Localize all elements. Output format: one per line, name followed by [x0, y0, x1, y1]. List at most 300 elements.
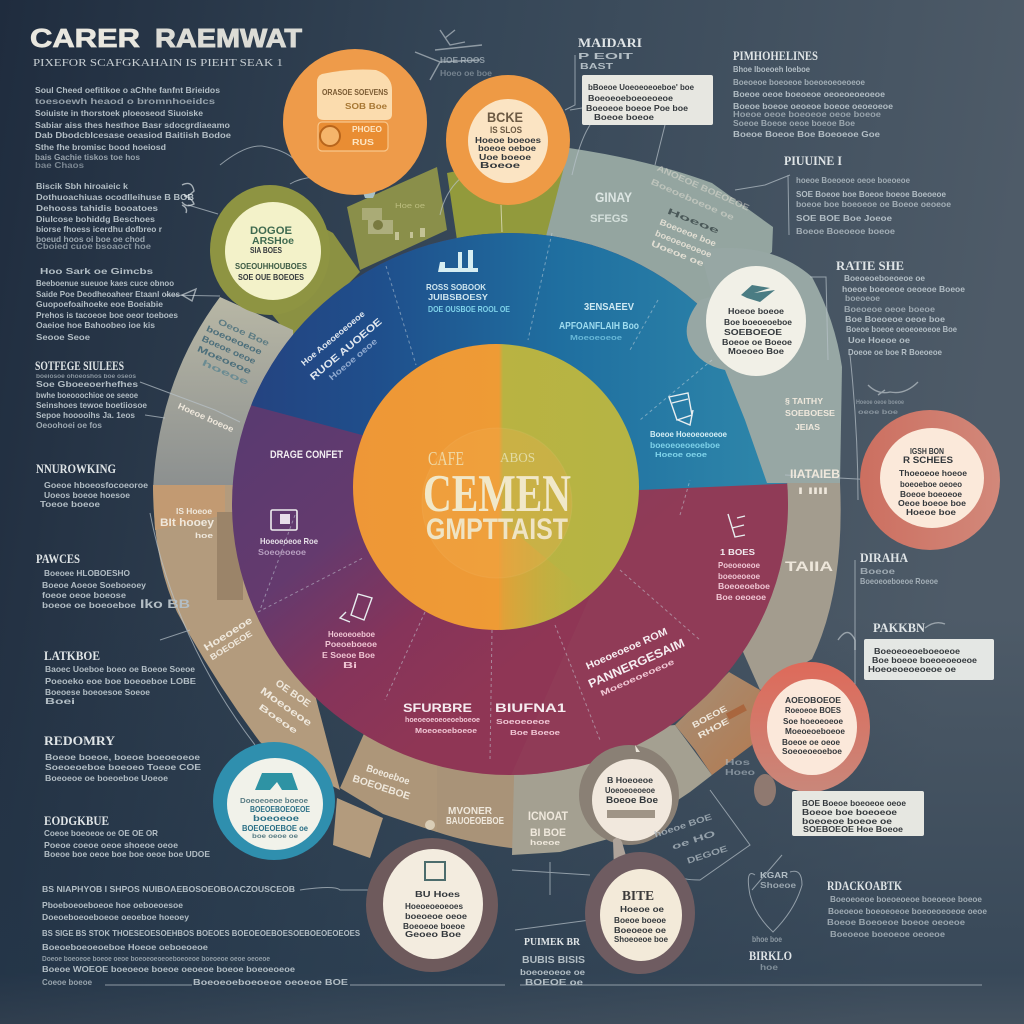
inner ring: blue right label 1: APFOANFLAIH Boo: [559, 321, 639, 332]
inner ring: right maroon label: [716, 514, 770, 602]
inner ring: blue right label 1: [559, 302, 639, 342]
droplet connector: [362, 166, 377, 198]
right heading and note card: Hoeoeoeoeoeoe oe: [868, 665, 957, 674]
ring label: tan bottom rotated: BOEOEBOE: [351, 773, 412, 803]
inner ring: purple icon label: Hoeoeoeoe Roe: [260, 536, 318, 546]
callout: olive circle: [210, 185, 330, 315]
right small sketch and caption: [856, 382, 918, 416]
left text block 1: toesoewh heaod o bromnhoeidcs: [35, 96, 215, 106]
right text block: roadmap: Boeoeoe boeoeoeoe boeoeoeoeoe oeoe: [828, 906, 987, 916]
icon: teal mountain glyph: [255, 773, 298, 790]
ring: [579, 745, 679, 845]
lower note card: SOEBOEOE Hoe Boeoe: [803, 825, 904, 834]
callout: sage circle with white disc: [706, 266, 806, 376]
right small sketch and caption: oeoe boe: [858, 409, 899, 416]
right text block: roadmap: Boeoe Boeoeoe boeoe oeoeoe: [827, 917, 965, 927]
callout: red circle right: [860, 410, 1000, 550]
ring label: tan rotated 1: [202, 615, 260, 662]
small top text: CAFE: [428, 448, 464, 470]
title: CARER: [30, 23, 140, 53]
right text block: rating: Boeoeoe oeoe boeoe: [844, 304, 935, 314]
left text block 1: Soiuiste in thorstoek ploeoseod Siuoiske: [35, 108, 203, 118]
orange-tan label patch: [153, 485, 225, 530]
bottom left text block: Boeoeboeoeoeboe Hoeoe oeboeoeoe: [42, 942, 208, 952]
inner: [468, 99, 548, 183]
inner: [383, 849, 483, 959]
right text block: rating: Doeoe oe boe R Boeoeoe: [848, 347, 942, 357]
sage lobe over ring: [687, 270, 800, 483]
left block 9: Poeoe coeoe oeoe shoeoe oeoe: [44, 840, 178, 850]
icon: document cup: [669, 393, 693, 425]
ring label: sage upper rotated 1: [649, 163, 751, 226]
callout: plum circle bottom right: Boeoeoe oe: [614, 926, 667, 935]
left text block 2: Biscik Sbh hiroaieic k: [36, 181, 128, 191]
inner ring: blue right label 2: [650, 393, 727, 459]
right text block: dialogue: Boeoeoeboeoe Roeoe: [860, 576, 938, 586]
callout: red circle lower: Moeoeoeboeoe: [785, 727, 846, 736]
top centre-right heading: P EOIT: [578, 51, 635, 61]
top centre-right heading: [578, 35, 642, 71]
grey bottom segment: [512, 725, 712, 855]
ring label: sage upper rotated 2: [650, 205, 723, 270]
right text block: planning: PIUUINE I: [784, 153, 842, 168]
icon: heart sketch with label: KGAR: [760, 870, 788, 880]
bottom left text block: [42, 884, 360, 987]
callout: olive circle: SIA BOES: [250, 246, 283, 255]
ring label: tan rotated 1: BOEOEOE: [208, 628, 254, 662]
left block 7: LATKBOE: [44, 648, 100, 663]
inner ring: maroon icon label: Hoeoeoeboe: [328, 629, 375, 639]
ring label: sage upper rotated 2: boeoeoeoeoe: [654, 228, 713, 260]
inner ring: blue right label 2: Boeoe Hoeoeoeoeoe: [650, 429, 727, 439]
centre title line 1: CEMEN: [423, 465, 571, 523]
icon: bars: [438, 250, 478, 272]
title word 2: RAEMWAT: [155, 23, 302, 53]
left block 9: EODGKBUE: [44, 813, 109, 828]
callout: teal circle: [213, 742, 335, 860]
inner ring: blue top label: ROSS SOBOOK: [426, 282, 487, 292]
right text block: roadmap: Boeoeoeoe boeoeoeoe boeoeoe boeoe: [830, 894, 982, 904]
inner ring: navy rotated label: [297, 303, 392, 391]
detached tan piece: [333, 798, 383, 858]
left block 8: Soeoeoeboe boeoeo Toeoe COE: [45, 762, 201, 772]
left block 9: Boeoe boe oeoe boe boe oeoe boe UDOE: [44, 849, 210, 859]
olive icon tile content: Hoe oe: [395, 203, 425, 210]
left block 4: bwhe boeooochioe oe seeoe: [36, 390, 138, 400]
inner ring: bottom label 1: Moeoeoeboeoe: [415, 728, 477, 735]
right heading and note card: PAKKBN: [873, 620, 926, 635]
left block 4: [35, 358, 147, 430]
ring: [213, 742, 335, 860]
top note card: bBoeoe Uoeoeoeoeboe' boe: [588, 83, 695, 92]
ring label: taupe top: IIATAIEB: [790, 467, 840, 481]
callout: red circle right: Hoeoe boe: [906, 508, 957, 517]
inner ring: bottom label 2: Boe Boeoe: [510, 730, 560, 737]
bottom centre text block: BOEOE oe: [525, 977, 583, 987]
inner: [592, 759, 672, 841]
right text block: guidelines: Hoeoe oeoe boeoeoe oeoe boeoe: [733, 109, 881, 119]
right text block: dialogue: DIRAHA: [860, 550, 909, 565]
inner ring: maroon icon label: [322, 594, 377, 670]
inner ring: right maroon label: Boe oeoeoe: [716, 592, 766, 602]
left text block 2: biorse fhoess icerdhu dofbreo r: [36, 224, 163, 234]
ring label: left sage rotated: Boeoe oeoe: [200, 333, 258, 366]
callout: orange circle with cards: SOB Boe: [345, 102, 388, 111]
callout: plum circle bottom right: Shoeoeoe boe: [614, 935, 669, 944]
callout: orange circle two: Boeoe: [480, 161, 521, 170]
top note card: [582, 75, 713, 125]
left block 6: Boeoee HLOBOESHO: [44, 568, 130, 578]
left block 4: boeiosoe ohoeoshos boe oseos: [36, 374, 137, 380]
left text block 1: Dab Dbodcblcesase oeasiod Baitiish Bodoe: [35, 130, 231, 140]
ring label: grey bottom: hoeoe: [530, 840, 560, 847]
callout: red circle lower: [750, 662, 870, 806]
inner ring: blue top label: JUIBSBOESY: [428, 292, 488, 302]
ring label: sage right: SOEBOESE: [785, 408, 835, 418]
icon: card: [271, 510, 297, 530]
callout: sage circle with white disc: Hoeoe boeoe: [728, 307, 785, 316]
icon: plant sketch: [435, 30, 482, 50]
inner ring: rotated maroon label: [580, 622, 691, 701]
inner ring: rotated maroon label: Moeoeoeoeoe: [599, 657, 676, 698]
left block 8: [44, 733, 201, 783]
ring label: left sage rotated: Oeoe Boe: [217, 316, 271, 348]
callout: orange circle two: BCKE: [487, 109, 523, 125]
inner ring: bottom label 1: [403, 701, 480, 735]
handwriting on dark gap: DEGOE: [686, 843, 729, 866]
right small sketch and caption: Hoeoe oeoe boeoe: [856, 399, 904, 406]
callout: olive circle: SOEOUHHOUBOES: [235, 262, 308, 271]
inner ring: rotated maroon label: PANNERGESAIM: [586, 636, 687, 691]
tan bottom segment: [340, 720, 440, 832]
right heading and note card: Boeoeoeoeboeoeoe: [874, 647, 961, 656]
right text block: planning: boeoe boe boeoeoe oe Boeoe oeoeoe: [796, 199, 951, 209]
icon: glyph: [728, 514, 745, 537]
callout: red circle right: Oeoe boeoe boe: [898, 499, 967, 508]
right text block: guidelines: Boeoe oeoe boeoeoe oeoeoeoeoeoe: [733, 89, 885, 99]
left text block 1: Soul Cheed oefitikoe o aChhe fanfnt Brieidos: [35, 85, 220, 95]
ring label: tan rotated 2: Boeoe: [257, 702, 300, 736]
callout: teal circle: BOEOEOEBOE oe: [242, 824, 309, 833]
callout: grey circle bottom: Boeoe Boe: [606, 795, 658, 805]
inner: [767, 679, 857, 775]
brown segment: [675, 672, 760, 775]
left block 8: REDOMRY: [44, 733, 116, 748]
card: [864, 639, 994, 680]
ring: [210, 185, 330, 315]
left text block 2: [36, 181, 194, 251]
ring label: tan left: IS Hoeoe: [176, 506, 212, 516]
left text block 1: bais Gachie tiskos toe hos: [35, 152, 140, 162]
left block 7: Baoec Uoeboe boeo oe Boeoe Soeoe: [45, 664, 195, 674]
connector between bottom circles: [613, 838, 630, 870]
ring label: sage upper rotated 2: Hoeoe: [666, 206, 721, 236]
callout: plum circle bottom left: Boeoeoe boeoe: [403, 922, 466, 931]
lower note card: BOE Boeoe boeoeoe oeoe: [802, 799, 907, 808]
bottom left text block: Coeoe boeoe: [42, 977, 92, 987]
left text block 2: Dothuoachiuas ocodlleihuse B BOB: [36, 192, 194, 202]
top note card: Boeoeoe boeoe Poe boe: [586, 104, 689, 113]
inner ring: right maroon label: Boeoeoeboe: [718, 581, 770, 591]
ring label: bottom centre: MVONER: [448, 806, 493, 817]
maroon sector: [220, 230, 800, 790]
leader lines: [105, 55, 982, 985]
orange blob: [283, 49, 427, 195]
right text block: planning: SOE Boeoe boe Boeoe boeoe Boeoeoe: [796, 189, 946, 199]
left block 4: SOTFEGE SIULEES: [35, 358, 124, 373]
ring label: grey bottom: ICNOAT: [528, 809, 569, 823]
left block 6: Boeoe Aoeoe Soeboeoey: [42, 580, 146, 590]
ring label: tan left: hoe: [195, 533, 213, 540]
top sketch label: HOE ROOS: [440, 55, 485, 65]
disc base: [353, 344, 639, 630]
inner ring: navy rotated label: Hoe Aoeoeoeoeoe: [299, 309, 367, 368]
sage right segment: [700, 248, 842, 483]
left text block 2: Cboied cuoe bsoaoct hoe: [36, 241, 151, 251]
callout: red circle lower: AOEOBOEOE: [785, 696, 842, 705]
left block 8: Boeoe boeoe, boeoe boeoeoeoe: [45, 752, 200, 762]
left text block 1: bae Chaos: [35, 160, 84, 170]
left block 6: [36, 551, 190, 611]
icon: pen: [340, 594, 372, 622]
right text block: guidelines: Soeoe Boeoe oeoe boeoe Boe: [733, 118, 855, 128]
callout: orange circle two: [446, 75, 570, 232]
ring label: sage right: JEIAS: [795, 422, 820, 432]
callout: plum circle bottom left: boeoeoe oeoe: [405, 912, 468, 921]
olive segment centre: [447, 148, 569, 240]
handwriting on dark gap: oe HO: [671, 828, 717, 852]
icon: bird sketch: [741, 285, 775, 302]
right text block: dialogue: Boeoe: [860, 566, 895, 576]
inner ring: maroon icon label: E Soeoe Boe: [322, 650, 375, 660]
icon: book glyph: [425, 862, 445, 880]
olive segment left behind circle: [260, 215, 360, 340]
bottom left text block: BS NIAPHYOB I SHPOS NUIBOAEBOSOEOBOACZOUSCEOB: [42, 884, 295, 894]
stem: [501, 205, 502, 232]
callout: plum circle bottom right: BITE: [622, 889, 654, 904]
lower note card: Boeoe boe boeoeoe: [802, 808, 898, 817]
right text block: guidelines: Boeoe Boeoe Boe Boeoeoe Goe: [733, 129, 880, 139]
bottom left text block: Doeoeboeoeboeoe oeoeboe hoeoey: [42, 912, 189, 922]
icon: arrow sketch: [182, 289, 196, 301]
left block 6: Iko BB: [140, 597, 190, 611]
inner ring: bottom label 2: [495, 701, 566, 737]
blue sector: [251, 233, 788, 490]
right text block: roadmap: RDACKOABTK: [827, 878, 903, 893]
callout: grey circle bottom: B Hoeoeoe: [607, 776, 654, 785]
inner ring: [232, 233, 788, 775]
ring label: sage right: [785, 396, 835, 432]
top sketch label: [440, 55, 492, 78]
callout: orange circle two: IS SLOS: [490, 125, 522, 135]
ring label: tan bottom rotated: Boeoeboe: [365, 763, 411, 788]
right text block: rating: hoeoe boeoeoe oeoeoe Boeoe: [842, 284, 965, 294]
right text block: guidelines: Boeoeoe boeoeoe boeoeoeoeoeoe: [733, 77, 865, 87]
ring label: bottom centre: [446, 806, 504, 827]
ring label: tan left: BIt hooey: [160, 517, 215, 529]
lower wedge blend: [500, 520, 590, 630]
left block 4: Oeoohoei oe fos: [36, 420, 102, 430]
bottom left text block: Boeoeoeboeoeoe oeoeoe BOE: [193, 977, 348, 987]
ring label: grey bottom: [528, 809, 569, 847]
inner ring: rotated maroon label: Hoeoeoeoe ROM: [585, 626, 669, 672]
left block 8: Boeoeoe oe boeoeboe Uoeoe: [45, 773, 168, 783]
bottom centre text block: BUBIS BISIS: [522, 955, 585, 966]
callout: sage circle with white disc: Moeoeo Boe: [728, 347, 785, 356]
ring label: left sage rotated: Moeoeoe: [196, 343, 253, 376]
card icon: [320, 126, 340, 146]
right text block: rating: RATIE SHE: [836, 258, 904, 273]
ring label: sage upper left: GINAY: [595, 189, 633, 205]
inner ring: maroon icon label: Poeoeboeoe: [325, 639, 377, 649]
callout: orange circle two: Hoeoe boeoes: [475, 136, 542, 145]
disc inner halo: [422, 428, 572, 578]
bottom centre text block: PUIMEK BR: [524, 936, 581, 948]
ring label: tan left: [160, 506, 215, 540]
right text block: guidelines: Bhoe Iboeoeh Ioeboe: [733, 64, 810, 74]
subtitle: PIXEFOR SCAFGKAHAIN IS PIEHT SEAK 1: [33, 57, 283, 69]
left text block 2: boeud hoos oi boe oe chod: [36, 234, 145, 244]
right text block: guidelines: PIMHOHELINES: [733, 48, 818, 63]
ring label: tan bottom rotated: [351, 760, 416, 803]
icon: heart sketch with label: BIRKLO: [749, 948, 792, 963]
right text block: roadmap: Boeoeoe boeoeoe oeoeoe: [830, 929, 945, 939]
left block 7: Boei: [45, 696, 75, 706]
right text block: guidelines: Boeoe boeoe oeoeoe boeoe oeoeoeoe: [733, 101, 893, 111]
handwriting on dark gap: [653, 810, 729, 873]
icon: heart sketch with label: [748, 870, 802, 972]
callout: sage circle with white disc: SOEBOEOE: [724, 328, 783, 337]
callout: olive circle: DOGOE: [250, 225, 292, 237]
left block 7: Poeoeko eoe boe boeoeboe LOBE: [45, 676, 196, 686]
ring label: left sage rotated: boeoeoeoe: [205, 323, 264, 357]
right text block: rating: Uoe Hoeoe oe: [848, 335, 910, 345]
left block 6: PAWCES: [36, 551, 80, 566]
ring label: grey bottom: BI BOE: [530, 827, 566, 839]
small pin: [635, 745, 640, 752]
ring label: left sage rotated: [191, 313, 271, 388]
left block 6: boeoe oe boeoeboe: [42, 600, 136, 610]
left text block 1: Sthe fhe bromisc bood hoeiosd: [35, 142, 166, 152]
left block 9: [44, 813, 210, 859]
inner ring: blue right label 2: Hoeoe oeoe: [655, 452, 707, 459]
bottom left text block: Boeoe WOEOE boeoeoe boeoe oeoeoe boeoe boeoeoeoe: [42, 964, 295, 974]
right heading and note card: [838, 620, 994, 680]
callout: grey circle bottom: Uoeoeoeoeoe: [605, 786, 656, 795]
ring label: taupe top: [790, 467, 840, 496]
olive icon tile content: [362, 203, 425, 240]
ring label: taupe top: I IIII: [798, 486, 828, 496]
inner ring: bottom label 2: Soeoeoeoe: [496, 719, 550, 726]
smudge bar: [607, 810, 655, 818]
left block 5: NNUROWKING: [36, 461, 116, 476]
left text block 1: [35, 85, 231, 170]
card: [582, 75, 713, 125]
inner ring: maroon icon label: Bi: [343, 660, 357, 670]
outer ring segments: [153, 148, 842, 858]
right text block: rating: boeoeoe: [845, 293, 880, 303]
maroon right tone: [518, 484, 788, 775]
right text block: roadmap: [827, 878, 987, 939]
icon: heart sketch with label: hoe: [760, 962, 778, 972]
callout: plum circle bottom left: [366, 820, 498, 972]
inner ring: blue top label: DOE OUSBOE ROOL OE: [428, 304, 510, 314]
top centre-right heading: BAST: [580, 61, 614, 71]
inner disc: [706, 266, 806, 376]
callout: sage circle with white disc: Boeoe oe Boeoe: [722, 338, 793, 347]
ring label: sage upper rotated 1: ANOEOE BOEOEOE: [656, 163, 751, 213]
inner ring: blue top label: [426, 250, 510, 314]
centre disc: [353, 344, 639, 630]
callout: orange circle two: Uoe boeoe: [479, 153, 532, 162]
callout: sage circle with white disc: Boe boeoeoeboe: [724, 318, 793, 327]
callout: orange circle with cards: PHOEO: [352, 125, 382, 134]
left block 4: Soe Gboeeoerhefhes: [36, 379, 138, 389]
sector dashed dividers: [258, 233, 712, 760]
top note card: Boeoe boeoe: [594, 113, 655, 122]
right text block: planning: hoeoe Boeoeoe oeoe boeoeoe: [796, 175, 910, 185]
inner ring: purple icon label: [258, 510, 318, 557]
ring label: brown patch: [690, 695, 749, 741]
callout: red circle right: Thoeoeoe hoeoe: [899, 469, 968, 478]
right text block: dialogue: [860, 550, 938, 586]
ring label: left sage lower: Hoeoe boeoe: [176, 401, 236, 434]
callout: red circle right: Boeoe boeoeoe: [900, 490, 963, 499]
ring: [860, 410, 1000, 550]
top sketch label: Hoeo oe boe: [440, 68, 492, 78]
ring label: sage upper left: SFEGS: [590, 213, 628, 225]
left block 6: foeoe oeoe boeose: [42, 590, 126, 600]
inner: [600, 869, 682, 961]
left block 5: Goeoe hboeosfocoeoroe: [44, 480, 148, 490]
icon: left squiggle glyph: [182, 183, 194, 213]
callout: teal circle: boeoeoe: [253, 814, 300, 823]
callout: red circle lower: Roeoeoe BOES: [785, 706, 842, 715]
callout: plum circle bottom right: Boeoe boeoe: [614, 916, 667, 925]
ring label: tan rotated 2: Moeoeoe: [258, 686, 314, 729]
ring label: tan rotated 1: Hoeoeoe: [202, 615, 255, 654]
left text block 3: [36, 266, 180, 342]
ring label: taupe right: TAIIA: [785, 558, 833, 574]
callout: orange circle two: boeoe oeboe: [478, 144, 537, 153]
left text block 3: Guopoefoaihoeke eoe Boeiabie: [36, 299, 163, 309]
inner ring: right maroon label: Poeoeoeoe: [718, 560, 760, 570]
ring: [446, 75, 570, 205]
right text block: planning: Boeoe Boeoeoe boeoe: [796, 226, 895, 236]
centre title line 2: GMPTTAIST: [426, 513, 568, 546]
left text block 3: Seooe Seoe: [36, 332, 90, 342]
left block 5: [36, 461, 148, 509]
callout: orange circle with cards: [283, 49, 427, 198]
right text block: rating: [836, 258, 965, 357]
callout: red circle right: IGSH BON: [910, 447, 944, 456]
right text block: guidelines: [733, 48, 893, 139]
ring: [585, 852, 695, 974]
ring: [366, 838, 498, 972]
ring label: sage upper left: [590, 189, 633, 225]
inner ring: blue right label 1: Moeoeoeoe: [570, 335, 622, 342]
lower note card: [792, 791, 924, 836]
ring label: sage upper rotated 2: Boeoeoe boe: [658, 217, 718, 249]
right heading and note card: Boe boeoe boeoeoeoeoe: [872, 656, 978, 665]
callout: olive circle: SOE OUE BOEOES: [238, 273, 305, 282]
callout: plum circle bottom right: [585, 852, 695, 974]
lower orange card: [318, 122, 388, 151]
inner ring: right maroon label: boeoeoeoe: [718, 571, 760, 581]
left block 9: Coeoe boeoeoe oe OE OE OR: [44, 828, 158, 838]
stem blob: [754, 774, 776, 806]
left block 7: [44, 648, 196, 706]
